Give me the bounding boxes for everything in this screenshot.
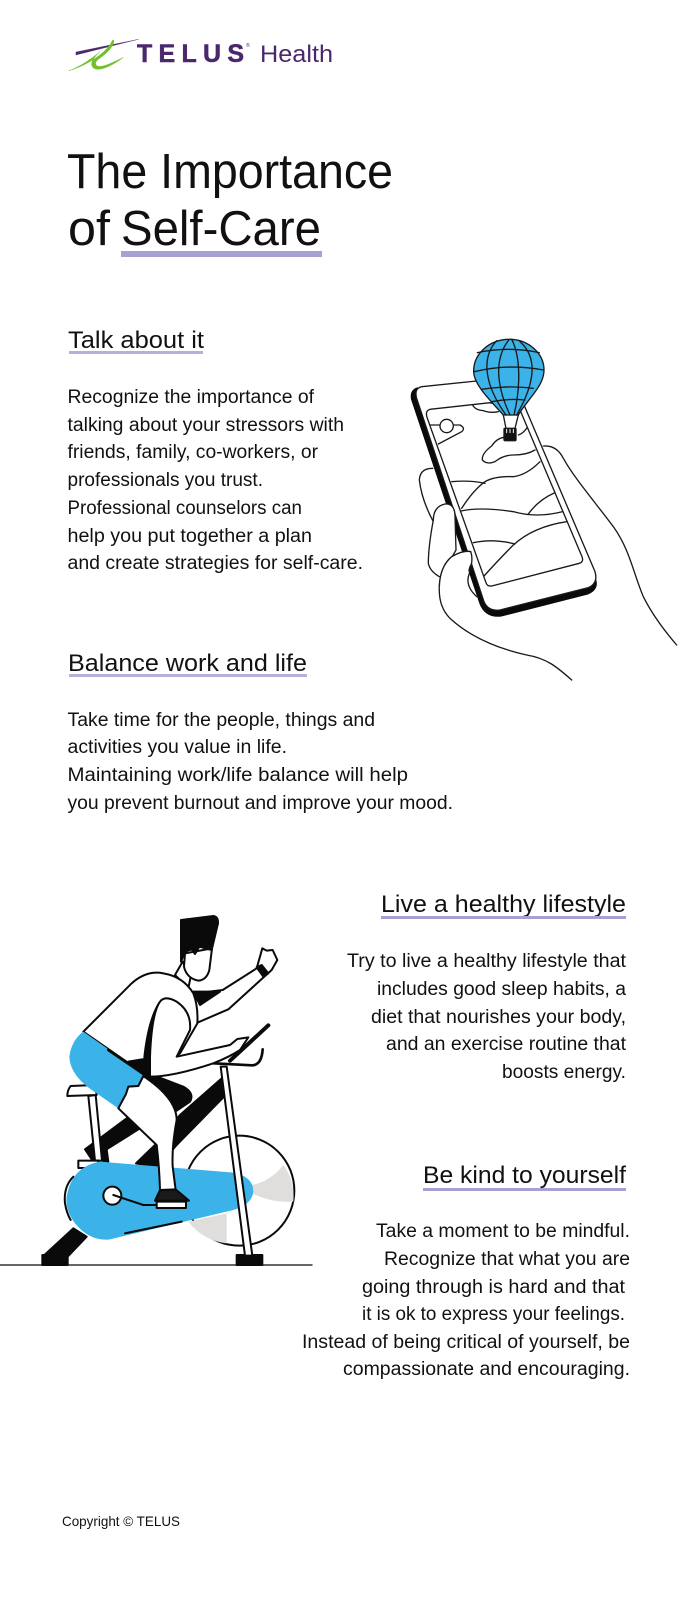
floor line [0, 1263, 312, 1267]
section: talk about it [68, 327, 363, 574]
text block: balance work and life: Take time for the people, things and [68, 710, 375, 731]
title: The Importance [67, 145, 393, 199]
text block: be kind to yourself: Instead of being critical of yourself, be [302, 1332, 630, 1353]
text block: talk about it: talking about your stressors with [68, 415, 344, 436]
torso shadow [144, 1003, 159, 1057]
text block: live a healthy lifestyle: boosts energy. [502, 1062, 626, 1083]
text block: be kind to yourself: going through is hard and that [362, 1277, 626, 1298]
text block: be kind to yourself: Take a moment to be mindful. [376, 1221, 630, 1242]
illustration: hand holding phone with balloon [411, 339, 677, 680]
text block: talk about it: and create strategies for self-care. [68, 553, 363, 574]
copyright: Copyright © TELUS [62, 1513, 180, 1529]
text block: live a healthy lifestyle: Try to live a healthy lifestyle that [347, 951, 627, 972]
text block: talk about it: Professional counselors can [68, 498, 302, 519]
text block: talk about it: help you put together a plan [68, 526, 312, 547]
handlebar arm [230, 1025, 268, 1061]
text block: balance work and life [68, 710, 453, 814]
illustration: cyclist on exercise bike [0, 916, 312, 1265]
logo: TELUS Health: TELUS [137, 40, 244, 68]
text block: balance work and life: activities you value in life. [68, 737, 287, 758]
section: balance work and life [68, 650, 453, 814]
hair and face [184, 948, 212, 981]
title [67, 145, 393, 257]
text block: talk about it: friends, family, co-workers, or [68, 442, 319, 463]
rider [69, 916, 277, 1208]
text block: be kind to yourself: it is ok to express your feelings. [362, 1304, 625, 1325]
bike frame [42, 1070, 262, 1265]
rear finger [419, 468, 433, 522]
text block: balance work and life: you prevent burnout and improve your mood. [68, 793, 453, 814]
text block: balance work and life: Maintaining work/life balance will help [68, 765, 408, 786]
text block: live a healthy lifestyle [347, 951, 627, 1083]
text block: talk about it: Recognize the importance of [68, 387, 315, 408]
text block: live a healthy lifestyle: diet that nourishes your body, [371, 1007, 626, 1028]
shorts [69, 1032, 143, 1108]
logo: TELUS Health: Health [260, 41, 333, 68]
logo: TELUS Health: ® [246, 42, 250, 49]
title: of [68, 202, 110, 256]
heading: live a healthy lifestyle: Live a healthy lifestyle [381, 891, 626, 918]
logo: TELUS Health [69, 39, 333, 71]
torso [83, 973, 197, 1077]
front post and handlebar [213, 1049, 263, 1256]
text block: be kind to yourself [302, 1221, 630, 1380]
front arm [150, 998, 248, 1077]
flywheel [184, 1136, 294, 1246]
heading: talk about it: Talk about it [68, 327, 204, 354]
hand back outline [543, 446, 677, 645]
title: Self-Care [121, 202, 321, 256]
heading: be kind to yourself: Be kind to yourself [423, 1162, 626, 1189]
screen landscape [473, 405, 498, 412]
heading: balance work and life: Balance work and life [68, 650, 307, 677]
flywheel cover [65, 1162, 253, 1240]
raised arm [195, 948, 277, 1023]
phone [411, 381, 596, 616]
section: be kind to yourself [302, 1162, 630, 1380]
text block: be kind to yourself: compassionate and encouraging. [343, 1359, 630, 1380]
section: live a healthy lifestyle [347, 891, 627, 1083]
front fingers and thumb [428, 504, 572, 680]
neck [175, 962, 191, 988]
shoe and pedal [155, 1189, 189, 1201]
text block: live a healthy lifestyle: and an exercise routine that [386, 1034, 627, 1055]
crank [103, 1187, 157, 1205]
leg [118, 1076, 177, 1190]
seat and post [67, 1085, 102, 1168]
text block: live a healthy lifestyle: includes good sleep habits, a [377, 979, 626, 1000]
text block: talk about it [68, 387, 363, 574]
text block: be kind to yourself: Recognize that what you are [384, 1249, 630, 1270]
balloon [474, 339, 544, 441]
text block: talk about it: professionals you trust. [68, 470, 263, 491]
